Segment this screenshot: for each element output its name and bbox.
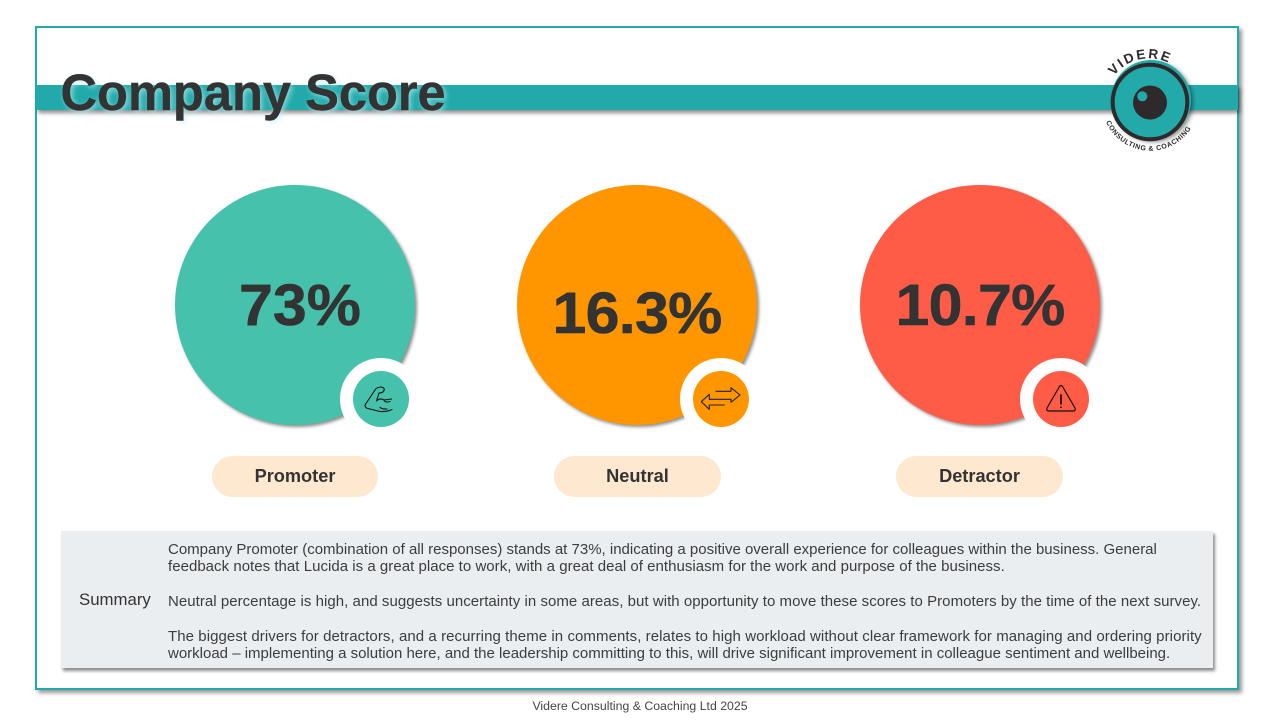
header band bbox=[36, 85, 1238, 110]
footer: Videre Consulting & Coaching Ltd 2025 bbox=[532, 699, 748, 713]
icon: exchange arrows bbox=[680, 358, 762, 440]
summary text: The biggest drivers for detractors, and a recurring theme in comments, relates to high workload without clear framework for managing and ordering priority bbox=[168, 628, 1202, 645]
neutral label bbox=[554, 456, 721, 497]
summary text: workload – implementing a solution here, and the leadership committing to this, will drive significant improvement in colleague sentiment and wellbeing. bbox=[168, 645, 1170, 662]
summary text: Company Promoter (combination of all responses) stands at 73%, indicating a positive overall experience for colleagues within the business. General bbox=[168, 541, 1157, 558]
panel: summary bbox=[61, 531, 1213, 668]
panel: detractor bbox=[860, 184, 1104, 497]
logo: Videre Consulting & Coaching bbox=[1106, 48, 1196, 151]
promoter circle bbox=[175, 185, 415, 425]
detractor value: 10.7% bbox=[895, 273, 1065, 338]
icon: warning triangle bbox=[1020, 358, 1102, 440]
neutral circle bbox=[517, 185, 757, 425]
detractor circle bbox=[860, 185, 1100, 425]
panel: neutral bbox=[516, 184, 762, 497]
neutral value: 16.3% bbox=[552, 281, 722, 346]
icon: flexed arm bbox=[340, 358, 422, 440]
panel: promoter bbox=[174, 184, 420, 497]
summary heading: Summary bbox=[79, 590, 151, 609]
promoter value: 73% bbox=[239, 273, 361, 338]
detractor label: Detractor bbox=[939, 466, 1020, 486]
summary text: Neutral percentage is high, and suggests uncertainty in some areas, but with opportunity to move these scores to Promoters by the time of the next survey. bbox=[168, 593, 1201, 610]
promoter label: Promoter bbox=[255, 466, 335, 486]
logo: Videre Consulting & Coaching: VIDERE bbox=[1107, 48, 1171, 74]
neutral label: Neutral bbox=[606, 466, 669, 486]
logo: Videre Consulting & Coaching: CONSULTING & COACHING bbox=[1106, 120, 1190, 151]
detractor label bbox=[896, 456, 1063, 497]
summary text: feedback notes that Lucida is a great place to work, with a great deal of enthusiasm for the work and purpose of the business. bbox=[168, 558, 1005, 575]
title: Company Score bbox=[60, 64, 446, 121]
promoter label bbox=[212, 456, 378, 497]
